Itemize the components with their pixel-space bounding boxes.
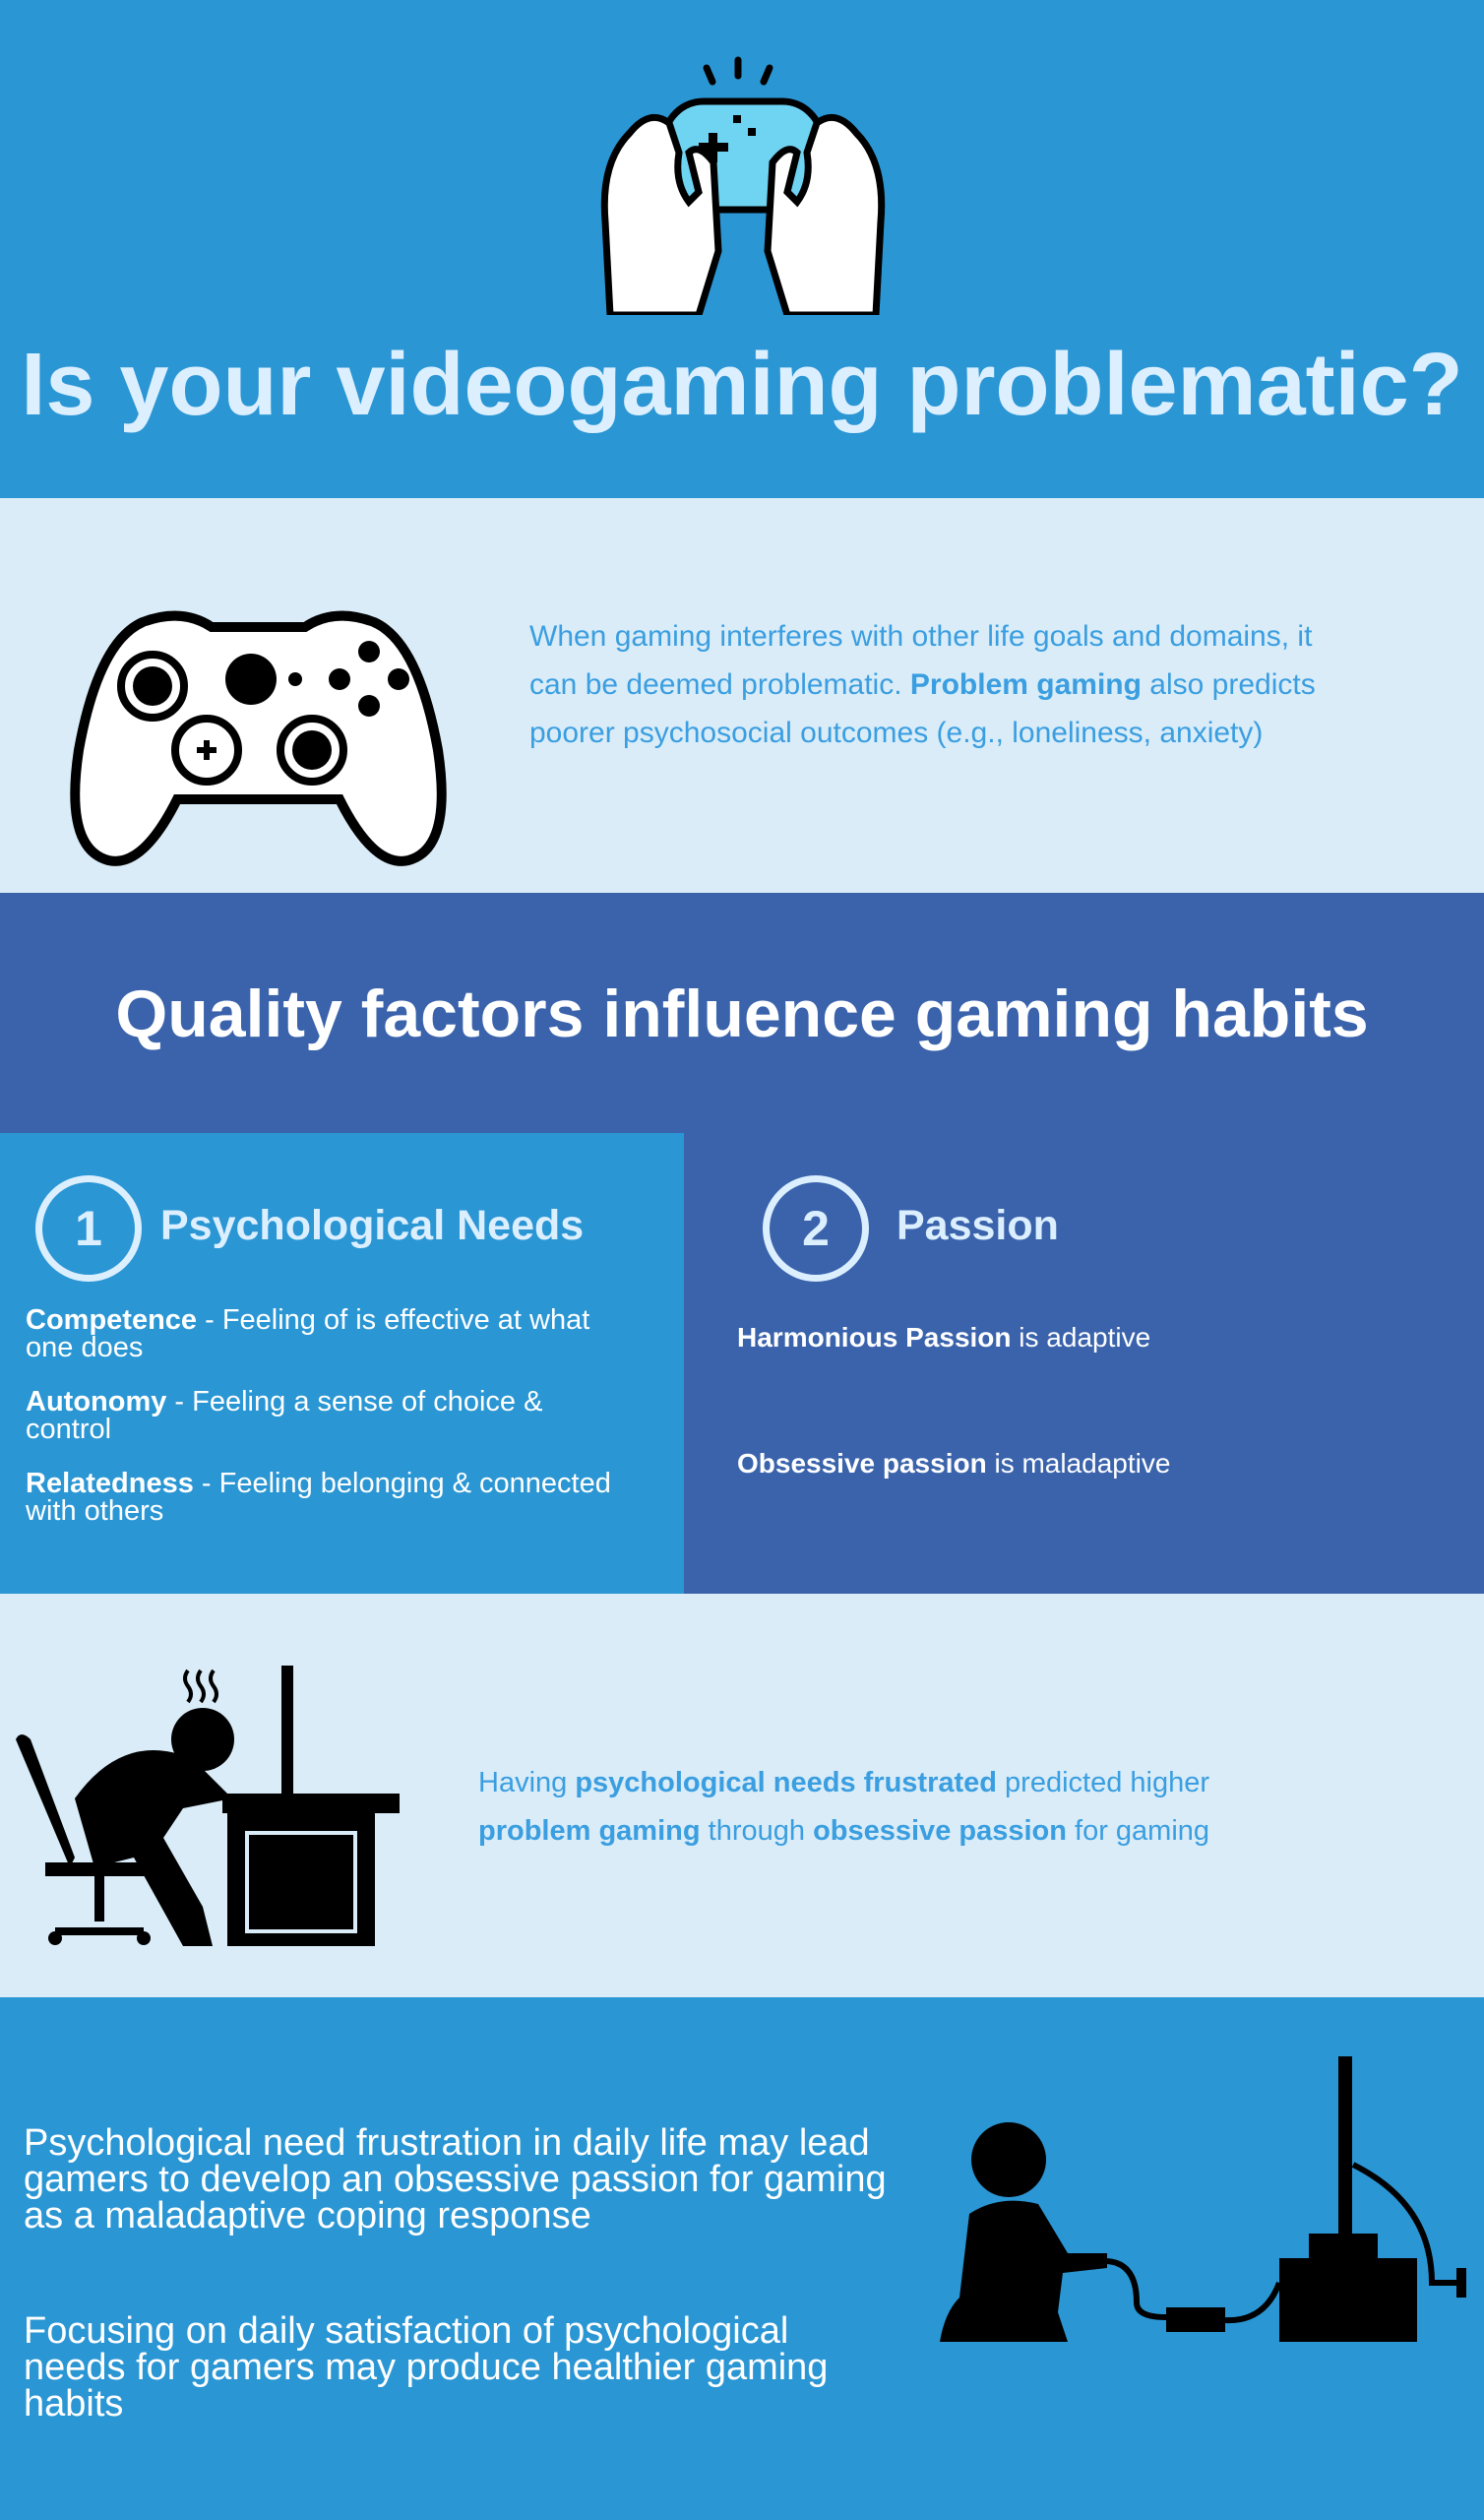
text: conclusion 1: Psychological need frustration in daily life may lead gamers to develop an obsessive passion for gaming as a maladaptive coping response [24,2122,887,2236]
icon: number 1: 1 [75,1201,102,1256]
icon: number 2: 2 [802,1201,830,1256]
text: needs list: Competence - Feeling of is effective at what one does [26,1304,589,1363]
panel: psychological needs [0,1133,684,1594]
text: conclusion 2: Focusing on daily satisfaction of psychological needs for gamers may produce healthier gaming habits [24,2310,828,2425]
icon: hands holding controller [600,57,886,315]
heading: psychological needs: Psychological Needs [160,1202,584,1249]
heading: quality factors [0,893,1484,1133]
icon: stressed person at desk [16,1666,400,1946]
text: needs list: Relatedness - Feeling belonging & connected with others [26,1468,611,1527]
heading: passion: Passion [897,1202,1059,1249]
text: finding: Having psychological needs frustrated predicted higher problem gaming through obsessive passion for gaming [478,1767,1209,1847]
icon: child playing on tv [940,2056,1466,2342]
icon: number 2 [763,1175,869,1282]
text: definition: When gaming interferes with other life goals and domains, it can be deemed problematic. Problem gaming also predicts poorer psychosocial outcomes (e.g., loneliness, anxiety) [529,620,1316,749]
text: needs list: Autonomy - Feeling a sense of choice & control [26,1386,542,1445]
panel: passion [684,1133,1484,1594]
icon: game controller [70,610,447,866]
heading: quality factors: Quality factors influence gaming habits [115,976,1369,1051]
panel: definition [0,498,1484,893]
title: Is your videogaming problematic? [21,336,1463,434]
text: harmonious: Harmonious Passion is adaptive [737,1322,1150,1353]
panel: conclusions [0,1997,1484,2520]
text: obsessive: Obsessive passion is maladaptive [737,1448,1170,1479]
header section [0,0,1484,498]
icon: number 1 [35,1175,142,1282]
text: needs list [26,1304,611,1527]
panel: finding [0,1594,1484,1997]
